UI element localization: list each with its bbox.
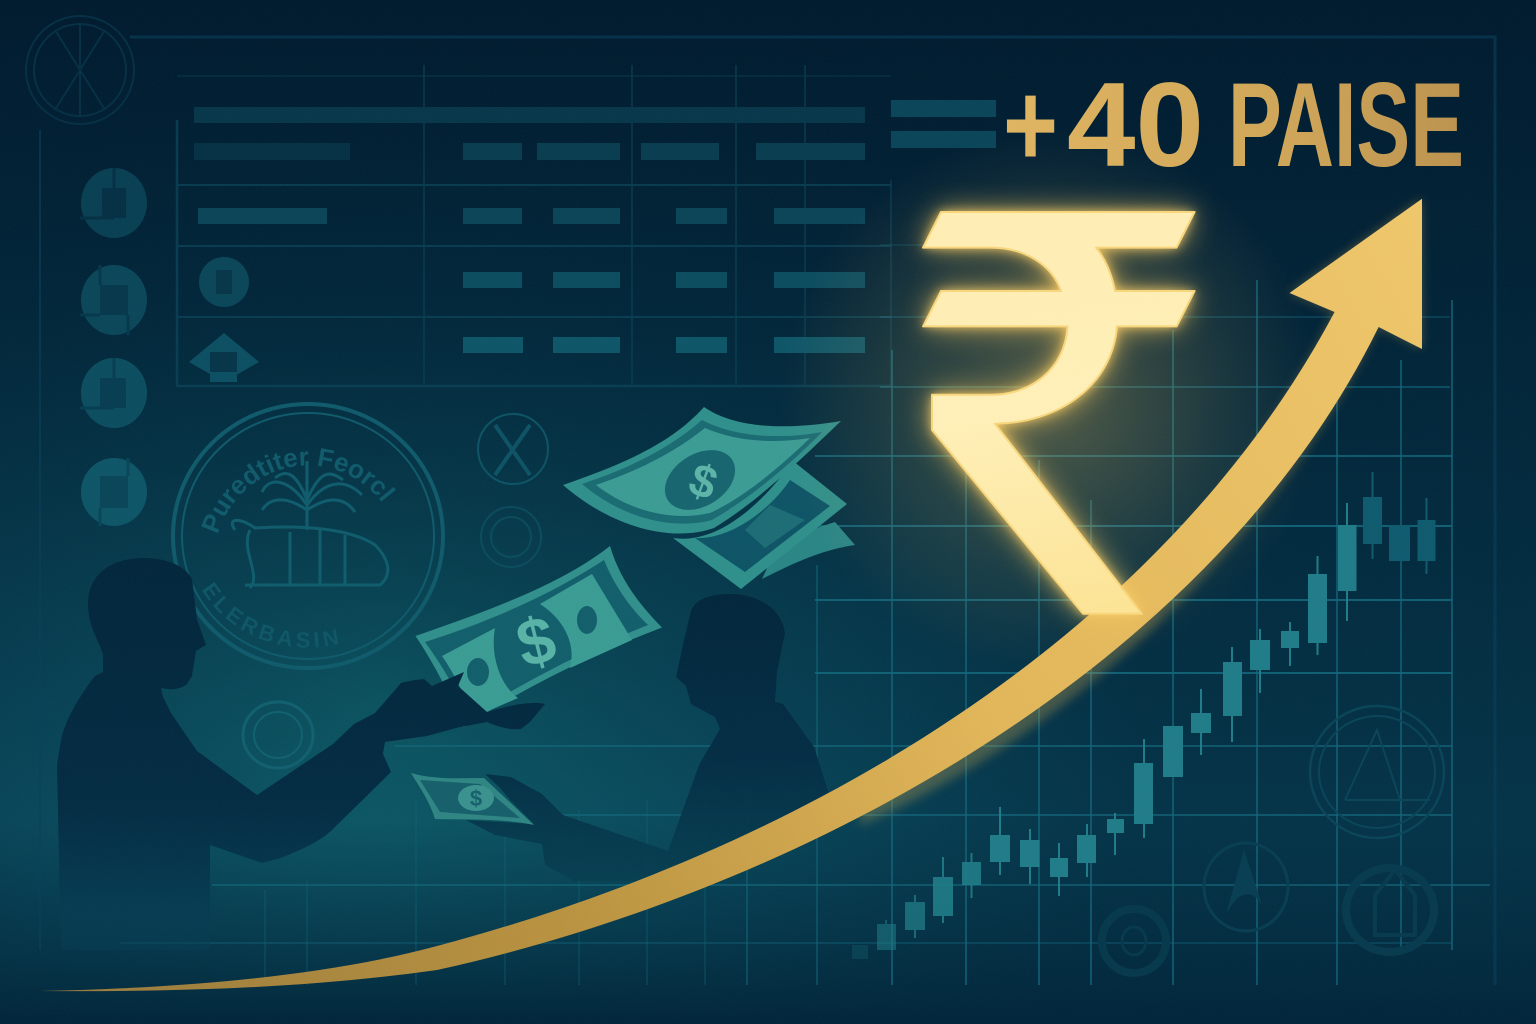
seal: right big bbox=[1310, 706, 1444, 838]
headline: +40 PAISE bbox=[1003, 58, 1464, 192]
person: right bbox=[466, 594, 830, 881]
logo 4 bbox=[81, 458, 147, 526]
table header bar bbox=[194, 107, 865, 123]
rising arrow bbox=[40, 198, 1422, 991]
table row 1 bbox=[194, 143, 865, 160]
logo 3 bbox=[80, 358, 147, 428]
RBI seal: Puredtiter Feorcl bbox=[202, 448, 396, 533]
small side bars bbox=[891, 100, 996, 148]
bank logo column bbox=[26, 16, 259, 526]
rupee body bbox=[923, 212, 1195, 614]
person: left bbox=[57, 558, 545, 950]
seal lettering bbox=[215, 465, 401, 545]
seal: crossed emblem bbox=[478, 414, 548, 484]
headline: +40 PAISE: + bbox=[1003, 58, 1058, 192]
RBI seal: ELERBASIN bbox=[202, 582, 338, 648]
bill: large centre bbox=[416, 546, 662, 727]
bill oval bbox=[654, 438, 746, 522]
rupee outer glow bbox=[923, 212, 1195, 614]
headline: +40 PAISE: 40 bbox=[1067, 58, 1204, 192]
bill: front bbox=[563, 407, 841, 534]
bill left panel bbox=[442, 628, 518, 718]
table row 4 bbox=[463, 337, 865, 353]
seal: bell bbox=[1346, 868, 1434, 952]
logo 1 bbox=[80, 168, 147, 238]
rupee tight glow bbox=[923, 212, 1195, 614]
small seals bbox=[243, 414, 1444, 973]
rupee glow bbox=[740, 100, 1380, 740]
seal: lower left bbox=[243, 702, 313, 768]
seal palm tree bbox=[262, 461, 362, 530]
dollar sign: $ bbox=[470, 786, 482, 811]
logo 2 bbox=[80, 265, 147, 335]
bill: back lower bbox=[762, 522, 855, 579]
faint candles bbox=[852, 920, 896, 959]
table grid lines bbox=[177, 65, 891, 386]
top left seal bbox=[26, 16, 134, 124]
table row 3 bbox=[463, 272, 865, 288]
mid candles bbox=[990, 503, 1356, 896]
table row 2 bbox=[198, 208, 865, 224]
upper bills stack bbox=[563, 407, 855, 589]
bill right panel bbox=[540, 574, 632, 668]
dollar sign: $ bbox=[509, 601, 563, 681]
seal: bottom bbox=[1102, 909, 1166, 973]
RBI seal bbox=[171, 402, 445, 670]
arrow glow bbox=[860, 198, 1422, 825]
dark top candles bbox=[1363, 472, 1436, 574]
rupee symbol bbox=[923, 212, 1195, 614]
seal tiger bbox=[232, 520, 388, 588]
arrow shape bbox=[40, 199, 1422, 991]
faint table bbox=[177, 65, 996, 386]
seal: round faint bbox=[481, 507, 541, 567]
table logo 1 bbox=[199, 257, 249, 307]
seal: compass bbox=[1204, 843, 1288, 931]
bill: small lower bbox=[411, 773, 534, 825]
candlestick chart bbox=[852, 472, 1436, 959]
table logo 2 bbox=[189, 333, 259, 382]
bill: back middle bbox=[673, 461, 847, 589]
grid: right chart bbox=[120, 245, 1490, 985]
dollar sign: $ bbox=[682, 452, 724, 510]
